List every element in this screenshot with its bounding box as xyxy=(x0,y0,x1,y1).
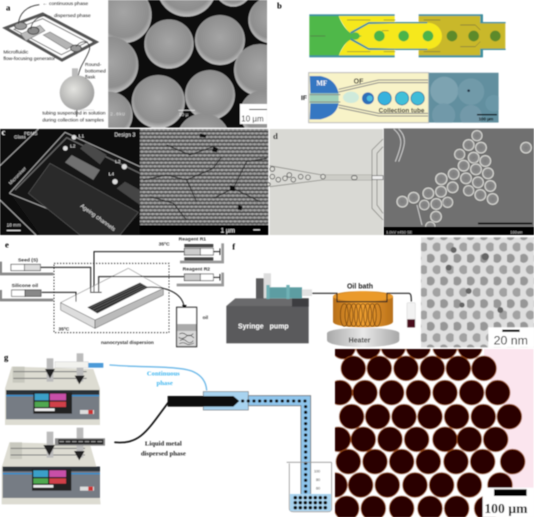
photo: microfluidic chip: L3 xyxy=(115,159,121,165)
photo: microfluidic chip: L4 xyxy=(109,172,114,178)
panel label b: b xyxy=(277,1,282,11)
syringe: reagent R2 xyxy=(177,267,223,285)
pump: dispersed phase xyxy=(2,428,105,504)
diagram: round-bottomed flask xyxy=(60,68,94,110)
label: liquid metal dispersed phase xyxy=(141,441,186,458)
diagram labels: bottomed xyxy=(85,68,106,74)
photo: microfluidic chip: Glass xyxy=(14,134,27,139)
collection vial xyxy=(177,307,197,347)
diagram labels: flow-focusing generator xyxy=(3,56,55,62)
label: liquid metal dispersed phase: dispersed phase xyxy=(141,451,186,458)
photo: microfluidic chip: Ageing channels xyxy=(79,203,116,233)
diagram labels xyxy=(3,1,106,123)
droplet array xyxy=(334,348,526,517)
scale bar: 100 µm: 100 µm xyxy=(484,501,528,516)
labels: nanocrystal dispersion xyxy=(101,340,154,346)
labels: oil xyxy=(203,315,208,320)
panel a: microfluidic generator and microsphere micrograph xyxy=(2,0,268,129)
micrograph: nanoparticles: 20 nm xyxy=(494,334,528,348)
photo: microfluidic chip: L1 xyxy=(79,134,84,140)
oil bath with coil xyxy=(312,284,411,327)
syringe: silicone oil: Silicone oil xyxy=(12,283,39,289)
microreactor chip xyxy=(61,268,163,328)
scale bar: 100 µm xyxy=(483,488,534,517)
panel d: droplet channel and sphere micrograph xyxy=(267,128,534,235)
syringe pump xyxy=(226,273,312,343)
tubing: continuous and dispersed phases xyxy=(110,365,207,443)
diagram labels: tubing suspended in solution xyxy=(42,110,106,116)
syringe: seed xyxy=(1,257,53,274)
labels xyxy=(58,315,208,346)
schematic: collection tube: IF xyxy=(301,95,307,102)
tubing and outlet arrow xyxy=(41,252,187,309)
pump: continuous phase xyxy=(5,353,103,425)
panel label f: f xyxy=(232,241,235,251)
photo: droplet generation channel: d xyxy=(273,131,278,141)
syringe: reagent R2: Reagent R2 xyxy=(183,267,210,273)
panel label g: g xyxy=(4,352,9,362)
dashed temperature box xyxy=(54,263,169,333)
collection beaker xyxy=(287,462,332,512)
oil bath with coil: Oil bath xyxy=(347,284,373,291)
panel label e: e xyxy=(5,239,9,249)
micrograph: nanoparticles xyxy=(421,237,534,348)
diagram labels: Round- xyxy=(85,62,102,68)
micrograph info bar: 100um xyxy=(510,229,523,234)
photo: microfluidic chip: L2 xyxy=(70,144,76,150)
photo: microfluidic chip xyxy=(0,128,140,235)
micrograph info bar: 1.0kV x450 SE xyxy=(386,229,413,234)
heater: Heater xyxy=(349,338,371,345)
photo: microfluidic chip: PDMS xyxy=(24,131,37,136)
panel f: syringe pump and oil bath xyxy=(226,237,534,348)
micrograph: microspheres: 10 µ xyxy=(179,112,188,117)
label: continuous phase: Continuous xyxy=(147,371,180,378)
diagram: flow-focusing device xyxy=(6,5,96,117)
diagram labels: during collection of samples xyxy=(42,117,104,123)
micrograph: double emulsion droplets: 100 µm xyxy=(479,116,494,121)
collection beaker: 100 xyxy=(314,470,320,474)
microfluidic channel with droplets xyxy=(168,392,311,496)
collection vial xyxy=(407,303,415,327)
photo: droplet generation channel xyxy=(267,129,383,235)
panel h: liquid metal droplets micrograph xyxy=(334,348,534,517)
schematic: collection tube: MF xyxy=(316,79,327,87)
diagram labels: Microfluidic xyxy=(3,49,29,55)
collection beaker: 80 xyxy=(316,478,320,482)
photo: microfluidic chip: 10 mm xyxy=(7,222,21,227)
schematic: collection tube: Collection tube xyxy=(379,107,425,114)
photo: microfluidic chip: Design 3 xyxy=(114,133,135,139)
schematic: collection tube xyxy=(301,73,429,123)
panel c: ageing-channel chip and nanoparticle lattice xyxy=(0,128,268,235)
photo: microfluidic chip: Micromixer xyxy=(8,166,28,186)
label: continuous phase: phase xyxy=(157,380,173,387)
syringe: seed: Seed (S) xyxy=(18,257,38,263)
syringe: reagent R1: Reagent R1 xyxy=(179,236,206,242)
schematic: double emulsion channel xyxy=(309,14,506,57)
label: continuous phase xyxy=(147,371,180,387)
micrograph: nanoparticle lattice: 1 µm xyxy=(221,228,235,235)
syringe pump: Syringe xyxy=(238,323,264,330)
micrograph: microspheres: 10 µm xyxy=(241,114,264,123)
diagram labels: ← continuous phase xyxy=(43,1,88,7)
labels: 35ºC xyxy=(58,327,70,333)
panel g: syringe pumps and liquid metal droplet device xyxy=(2,352,332,512)
micrograph info bar xyxy=(384,223,534,235)
diagram labels: ← dispersed phase xyxy=(48,13,91,19)
schematic: collection tube: OF xyxy=(354,78,364,85)
syringe: reagent R1 xyxy=(159,236,223,262)
micrograph: microspheres xyxy=(108,0,268,129)
heater xyxy=(327,328,399,347)
photo: microfluidic chip: c xyxy=(2,128,6,137)
syringe: silicone oil xyxy=(1,283,53,300)
micrograph: packed spheres xyxy=(384,128,534,232)
diagram labels: flask xyxy=(85,75,96,81)
panel b: capillary device schematics xyxy=(277,1,506,127)
micrograph: double emulsion droplets xyxy=(429,73,502,127)
label: liquid metal dispersed phase: Liquid metal xyxy=(145,441,182,448)
collection beaker: 60 xyxy=(316,486,320,490)
panel label a: a xyxy=(6,3,11,13)
micrograph: nanoparticle lattice xyxy=(140,129,268,235)
panel e: nanocrystal flow synthesis schematic xyxy=(1,236,235,347)
micrograph: microspheres: 2.0kU xyxy=(110,112,125,118)
syringe pump: pump xyxy=(270,323,289,330)
syringe: reagent R1: 35ºC xyxy=(159,241,170,247)
